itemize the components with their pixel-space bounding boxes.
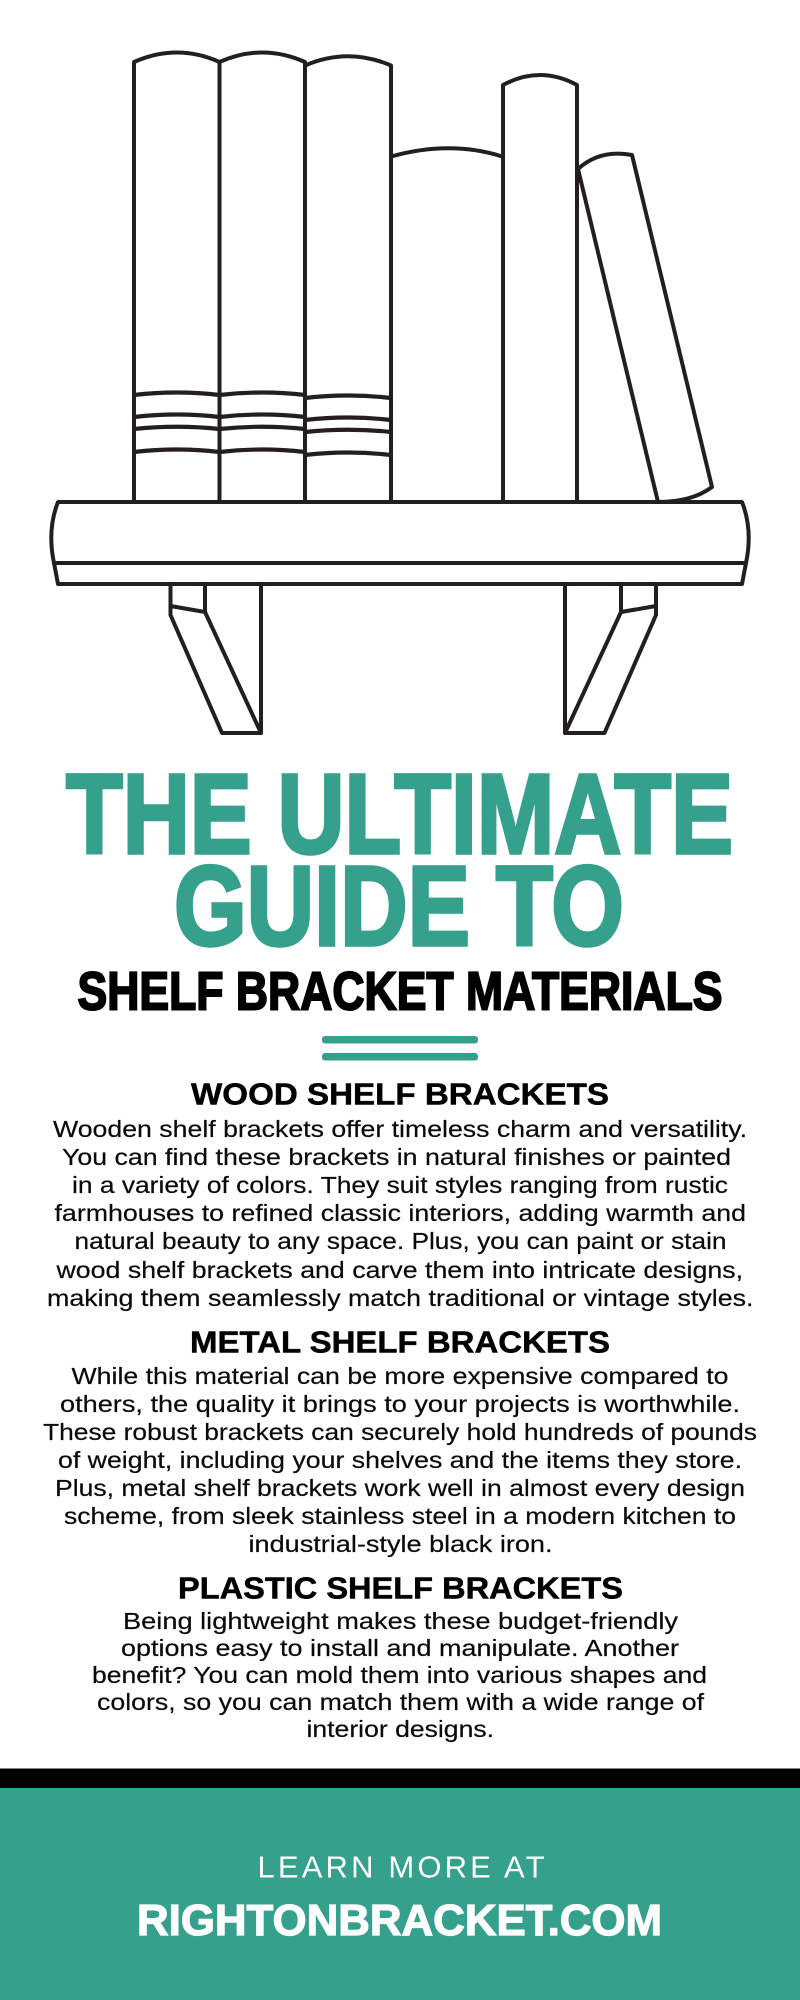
metal text: industrial-style black iron. xyxy=(248,1531,552,1557)
title xyxy=(66,751,733,969)
section: plastic xyxy=(92,1570,707,1742)
metal text: Plus, metal shelf brackets work well in almost every design xyxy=(55,1475,745,1501)
wood text: natural beauty to any space. Plus, you can paint or stain xyxy=(74,1228,727,1254)
metal text: others, the quality it brings to your projects is worthwhile. xyxy=(60,1391,740,1417)
footer url: RIGHTONBRACKET.COM xyxy=(137,1897,662,1945)
wood text: Wooden shelf brackets offer timeless charm and versatility. xyxy=(53,1116,747,1142)
metal heading: METAL SHELF BRACKETS xyxy=(190,1324,610,1360)
plastic text: Being lightweight makes these budget-friendly xyxy=(123,1608,678,1634)
wood text: wood shelf brackets and carve them into intricate designs, xyxy=(55,1257,743,1283)
right bracket xyxy=(565,584,656,733)
wood text: You can find these brackets in natural finishes or painted xyxy=(62,1144,731,1170)
wood text: making them seamlessly match traditional or vintage styles. xyxy=(47,1285,754,1311)
plastic text: interior designs. xyxy=(306,1716,494,1742)
illustration: books on a shelf xyxy=(51,52,749,733)
plastic text: benefit? You can mold them into various shapes and xyxy=(92,1662,707,1688)
metal text: These robust brackets can securely hold hundreds of pounds xyxy=(43,1419,757,1445)
section: wood xyxy=(47,1076,754,1311)
black band xyxy=(0,1768,800,1788)
left bracket xyxy=(170,584,261,733)
wood text xyxy=(47,1116,754,1311)
metal text: of weight, including your shelves and the items they store. xyxy=(58,1447,742,1473)
wood text: in a variety of colors. They suit styles ranging from rustic xyxy=(72,1172,728,1198)
plastic text: options easy to install and manipulate. Another xyxy=(121,1635,679,1661)
divider xyxy=(322,1036,478,1060)
section: metal xyxy=(43,1324,757,1557)
metal text xyxy=(43,1363,757,1557)
title: GUIDE TO xyxy=(174,843,624,969)
footer label: LEARN MORE AT xyxy=(258,1850,545,1884)
footer panel xyxy=(0,1788,800,2000)
metal text: scheme, from sleek stainless steel in a modern kitchen to xyxy=(64,1503,736,1529)
plastic text: colors, so you can match them with a wide range of xyxy=(97,1689,705,1715)
plastic text xyxy=(92,1608,707,1742)
shelf board xyxy=(51,502,749,584)
wood heading: WOOD SHELF BRACKETS xyxy=(191,1076,609,1112)
wood text: farmhouses to refined classic interiors, adding warmth and xyxy=(54,1200,746,1226)
metal text: While this material can be more expensive compared to xyxy=(72,1363,728,1389)
plastic heading: PLASTIC SHELF BRACKETS xyxy=(178,1570,623,1606)
books group xyxy=(134,52,712,502)
